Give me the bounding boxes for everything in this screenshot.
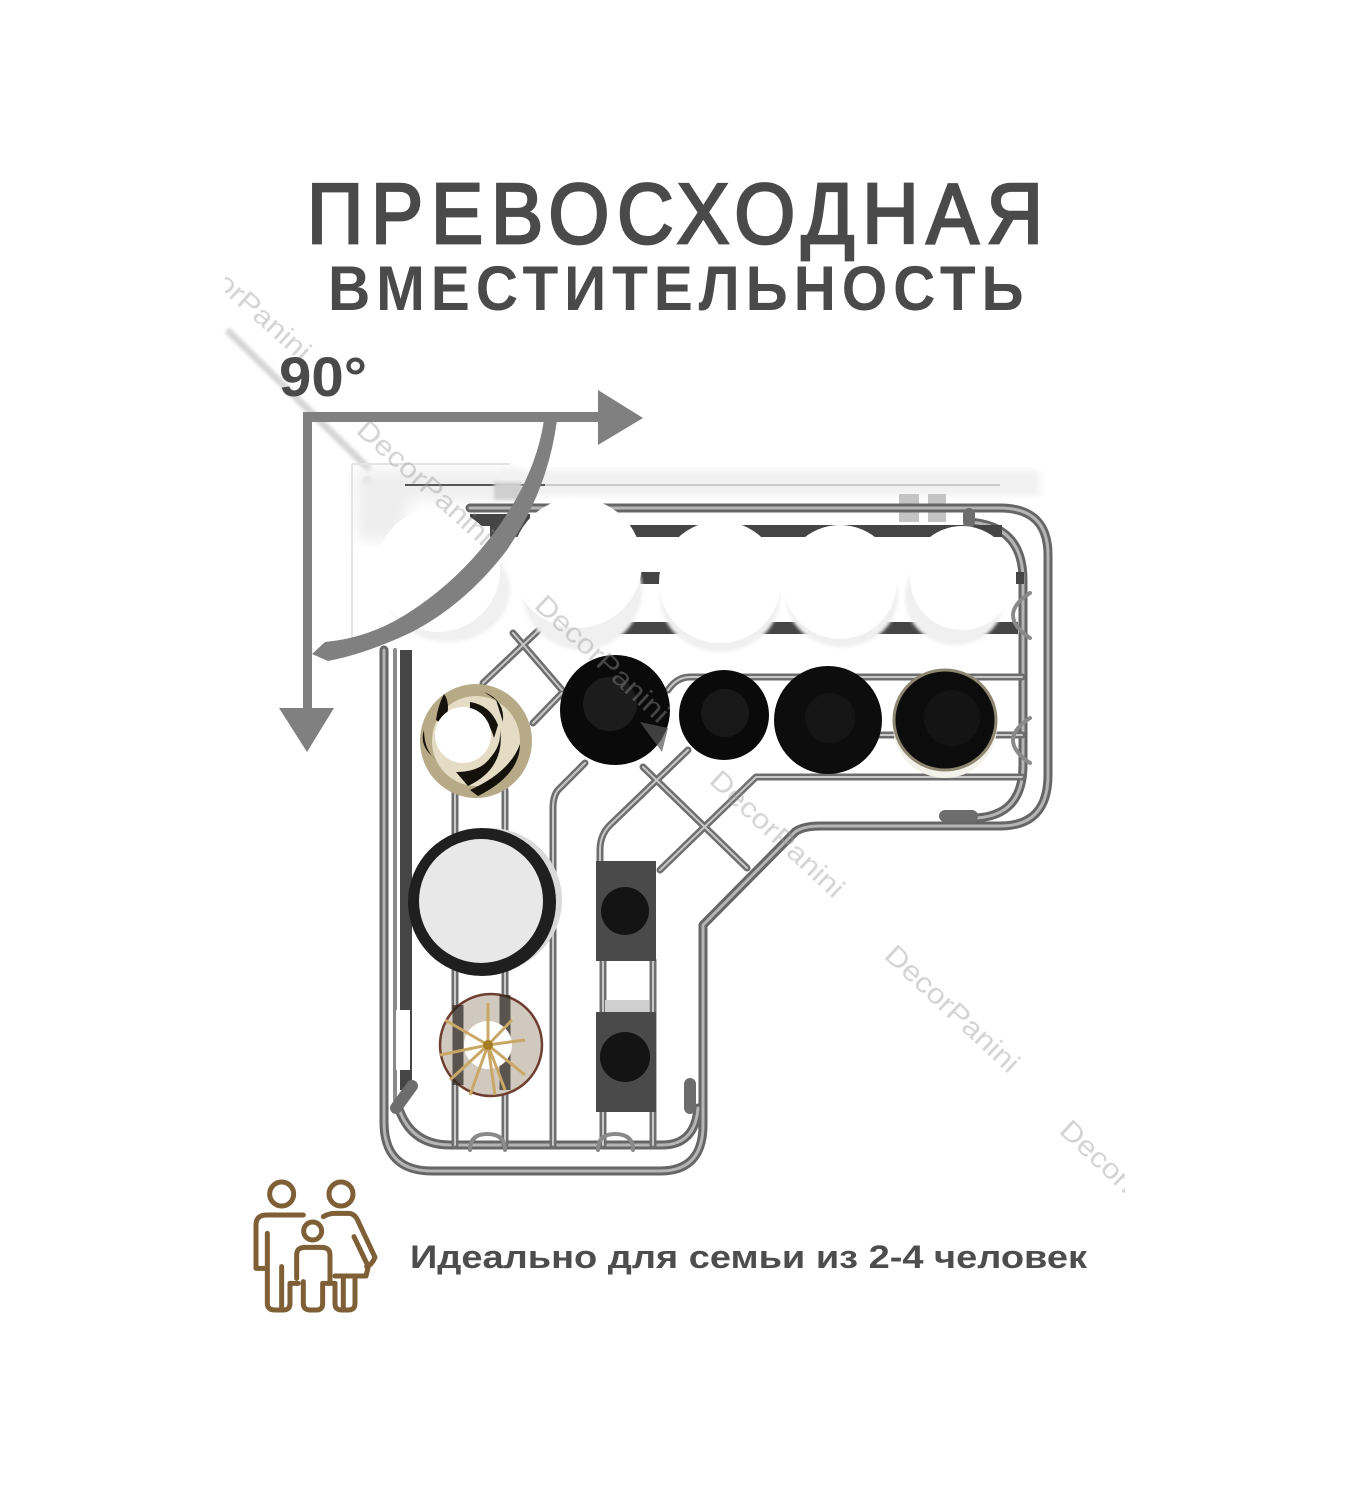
main rails [384,508,1048,1171]
plate 2 [512,498,642,628]
plate shadows [386,530,1005,652]
plate 5 [910,526,1014,630]
horizontal arrow [303,390,643,445]
black plate 1 [560,655,670,765]
watermarks: DecorPanini [704,764,851,904]
right adult [323,1182,375,1310]
plate 4 [783,525,897,639]
black plate 3 [774,666,882,774]
background: cabinet corner shading [227,330,1040,640]
knobs [396,514,972,1108]
inner wires [455,627,1022,1145]
white plates row [376,498,1014,652]
watermarks: DecorPanini [1054,1114,1201,1254]
pan with dark ring [408,828,562,976]
watermarks [225,277,1125,1194]
plate 1 [376,508,500,632]
title line 1: ПРЕВОСХОДНАЯ [307,167,1043,262]
right side hooks [1013,593,1030,763]
90 degree label: 90° [279,345,367,408]
gold whisk bowl [440,994,542,1096]
black plate 2 [679,670,769,760]
left adult [256,1182,303,1310]
plate 3 [659,521,781,643]
dark plates row [420,655,997,798]
watermarks: DecorPanini [879,939,1026,1079]
curved arrow [312,420,557,661]
clip latch [396,1010,410,1070]
family icon [256,1182,375,1310]
vertical arrow [279,412,334,752]
black plate with rim [893,670,997,778]
watermarks: DecorPanini [529,589,676,729]
lower hooks [470,1134,633,1150]
wire rack [384,508,1048,1171]
title line 2: ВМЕСТИТЕЛЬНОСТЬ [328,253,1024,323]
gold bowl [420,684,532,798]
caption: Идеально для семьи из 2-4 человек [410,1239,1088,1275]
watermarks: DecorPanini [351,413,500,552]
dark holders [596,861,656,1112]
whisk wires [440,1003,525,1095]
title [307,167,1043,323]
holder 1 [596,861,656,961]
watermarks: DecorPanini [169,228,318,367]
holder 2 [596,1000,656,1112]
dark rail sections [406,520,1024,1090]
child [297,1222,335,1310]
second rail on left side [393,650,397,1100]
